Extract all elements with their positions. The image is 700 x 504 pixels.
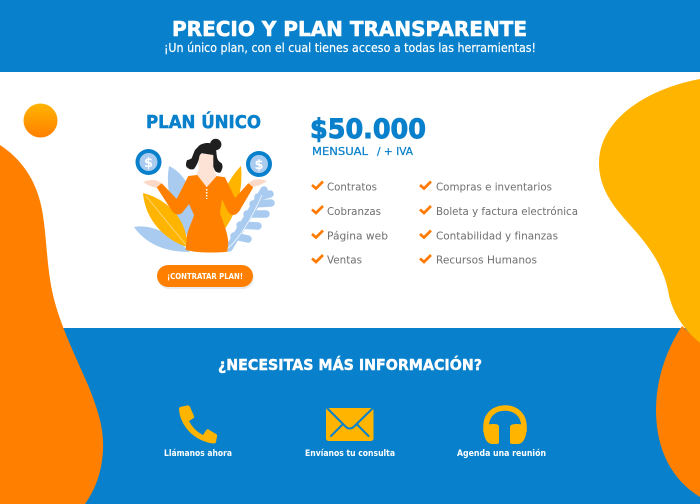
coin left: $ [144, 156, 153, 171]
footer heading: ¿NECESITAS MÁS INFORMACIÓN? [218, 355, 482, 374]
dress [157, 175, 253, 253]
neck and chest [196, 168, 217, 188]
contact label: email: Envíanos tu consulta [305, 449, 395, 459]
feature list: column 1 [312, 180, 388, 266]
leaf: right fern [226, 190, 271, 250]
hair bun [210, 139, 221, 150]
right yellow blob [599, 79, 700, 343]
feature list: column 2 [420, 180, 578, 266]
contact label: meeting: Agenda una reunión [457, 448, 546, 459]
feature list: column 1: Página web [327, 230, 388, 242]
price period: MENSUAL [312, 145, 369, 158]
illustration: woman with coins [134, 139, 272, 253]
arms: hands [143, 179, 267, 188]
icon: phone [179, 405, 217, 444]
feature list: column 1: Ventas [327, 254, 362, 266]
feature list: column 1: Contratos [327, 180, 377, 194]
subtitle: ¡Un único plan, con el cual tienes acceso a todas las herramientas! [164, 41, 536, 55]
price: $50.000 [310, 114, 426, 145]
feature list: column 2: Recursos Humanos [436, 254, 537, 266]
leaf: lower left blue [134, 226, 190, 252]
footer panel background [0, 328, 700, 504]
plan heading: PLAN ÚNICO [146, 111, 261, 133]
price period [312, 145, 413, 158]
leaf: left yellow [143, 193, 187, 247]
hair [186, 143, 223, 173]
feature list: column 2: Compras e inventarios [436, 180, 552, 194]
contact label: call: Llámanos ahora [164, 449, 232, 459]
left orange blob [0, 145, 103, 504]
face [198, 154, 214, 176]
icon: headphones [483, 408, 527, 444]
feature list: column 2: Boleta y factura electrónica [436, 205, 578, 218]
right orange blob [656, 326, 700, 497]
coin right: $ [254, 158, 264, 173]
title: PRECIO Y PLAN TRANSPARENTE [172, 17, 527, 41]
leaf: right yellow [218, 166, 241, 232]
leaf: upper left blue [168, 166, 198, 248]
feature list: column 2: Contabilidad y finanzas [436, 230, 558, 242]
button: contratar plan [157, 265, 254, 289]
feature list: column 1: Cobranzas [327, 205, 381, 218]
button: contratar plan: ¡CONTRATAR PLAN! [167, 272, 243, 281]
dress buttons [206, 189, 208, 199]
decorative gradient circle [24, 104, 58, 138]
header panel [0, 0, 700, 72]
icon: envelope [326, 408, 374, 441]
price period: / + IVA [377, 145, 413, 158]
